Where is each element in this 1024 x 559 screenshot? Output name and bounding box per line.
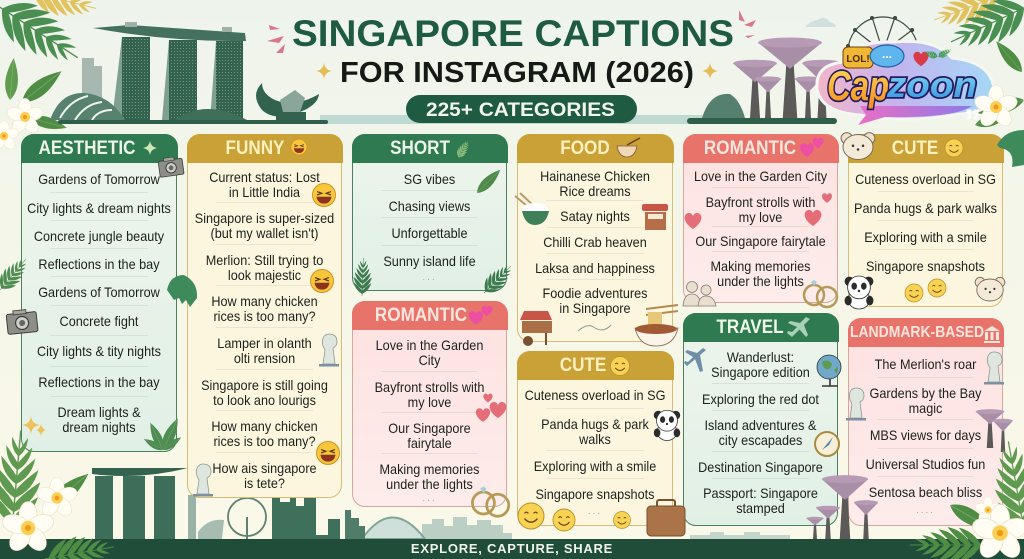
captions: cute (right): Cuteness overload in SG xyxy=(855,171,996,187)
gold star left xyxy=(316,63,332,79)
flowers top left xyxy=(0,98,45,152)
icon: supertrees landmark xyxy=(976,409,1013,452)
heading: cute (middle) xyxy=(516,350,674,380)
centre dome xyxy=(175,109,247,120)
skyline bottom left xyxy=(92,468,365,541)
captions: romantic (right): Bayfront strolls with xyxy=(706,194,815,210)
captions: aesthetic: Concrete jungle beauty xyxy=(34,228,164,244)
icon: sprig short right xyxy=(478,260,517,299)
captions: cute (middle): ... xyxy=(588,506,602,517)
heading: landmark-based xyxy=(848,318,1004,346)
captions: funny: look majestic xyxy=(228,267,301,283)
captions: romantic (middle): Bayfront strolls with xyxy=(375,379,484,395)
dome right xyxy=(702,94,745,118)
base strip left xyxy=(58,120,328,124)
panel: travel xyxy=(683,313,838,526)
icon: smileys right xyxy=(905,279,946,302)
icon: hamster xyxy=(841,133,875,160)
captions: food: Rice dreams xyxy=(559,183,631,199)
captions: landmark-based: The Merlion's roar xyxy=(875,356,976,372)
palm fronds: top left xyxy=(0,0,100,133)
captions: travel: city escapades xyxy=(719,432,802,448)
captions: cute (middle): Cuteness overload in SG xyxy=(525,387,665,403)
icon: merlion sketch funny right xyxy=(319,334,339,366)
captions: romantic (middle): Our Singapore xyxy=(388,420,471,436)
captions: travel: Destination Singapore xyxy=(698,459,823,475)
captions: funny: in Little India xyxy=(229,184,300,200)
Capzoon logo xyxy=(817,41,994,141)
panel: aesthetic xyxy=(21,134,177,452)
captions: funny: Merlion: Still trying to xyxy=(206,252,323,268)
captions: cute (right): Singapore snapshots xyxy=(866,258,985,274)
ferris wheel xyxy=(848,17,918,87)
panel: landmark-based xyxy=(848,318,1003,526)
captions: funny: is tete? xyxy=(244,475,285,491)
captions: food: in Singapore xyxy=(559,300,631,316)
captions: romantic (middle): fairytale xyxy=(407,435,452,451)
panel: romantic (right) xyxy=(683,134,838,303)
captions: cute (middle): Panda hugs & park xyxy=(541,416,649,432)
captions: cute (middle): Singapore snapshots xyxy=(535,486,655,502)
Marina Bay Sands towers xyxy=(82,22,246,120)
captions: aesthetic: dream nights xyxy=(62,419,136,435)
Capzoon logo: ” xyxy=(964,103,981,141)
icon: fern left xyxy=(0,253,33,296)
title sparks right xyxy=(739,10,756,38)
captions: cute (right) xyxy=(854,171,997,274)
captions: short: Sunny island life xyxy=(383,253,476,269)
icon: panda right xyxy=(845,276,873,309)
captions: cute (middle) xyxy=(525,387,665,517)
captions: romantic (right): my love xyxy=(739,209,782,225)
captions: funny: (but my wallet isn't) xyxy=(210,225,319,241)
Capzoon logo: zoon xyxy=(886,64,977,105)
captions: travel: Singapore edition xyxy=(711,364,810,380)
captions: food: Laksa and happiness xyxy=(535,260,655,276)
pale skyline bottom right xyxy=(690,532,790,539)
captions: short xyxy=(381,171,478,283)
captions: aesthetic xyxy=(27,171,171,435)
captions: romantic (middle): Making memories xyxy=(379,461,479,477)
captions: romantic (right) xyxy=(694,168,827,289)
captions: romantic (right): Love in the Garden City xyxy=(694,168,827,184)
heading: short: SHORT xyxy=(390,138,449,158)
captions: landmark-based: magic xyxy=(909,400,942,416)
icon: hearts romantic right xyxy=(800,138,823,157)
captions: romantic (middle): Love in the Garden xyxy=(376,337,483,353)
icon: suitcase xyxy=(647,500,685,536)
captions: funny: How ais singapore xyxy=(212,460,317,476)
captions: landmark-based: .... xyxy=(916,505,935,516)
captions: funny: rices is too many? xyxy=(213,433,316,449)
captions: landmark-based xyxy=(866,356,985,516)
captions: funny: Singapore is still going xyxy=(201,377,328,393)
panel: cute (right) xyxy=(848,134,1003,307)
captions: short: Chasing views xyxy=(389,198,470,214)
captions: aesthetic: City lights & dream nights xyxy=(27,200,171,216)
captions: food xyxy=(535,168,655,316)
Capzoon logo: Cap xyxy=(827,62,889,109)
heading: funny: FUNNY xyxy=(225,138,284,158)
heading: romantic (right): ROMANTIC xyxy=(703,138,796,158)
captions: food: Hainanese Chicken xyxy=(540,168,650,184)
heading: cute (right): CUTE xyxy=(891,138,938,158)
palm bottom left xyxy=(0,428,117,559)
Capzoon logo: LOL! xyxy=(846,54,870,65)
captions: food: Foodie adventures xyxy=(543,285,647,301)
icon: smiley small xyxy=(614,512,630,528)
captions: landmark-based: Gardens by the Bay xyxy=(870,385,981,401)
captions: funny: How many chicken xyxy=(211,293,318,309)
badge: 225+ categories: 225+ CATEGORIES xyxy=(426,99,615,121)
flower and leaf top right xyxy=(973,85,1019,130)
captions: funny: olti rension xyxy=(234,350,295,366)
icon: panda middle xyxy=(654,410,680,440)
captions: cute (right): Panda hugs & park walks xyxy=(854,200,997,216)
captions: funny: Current status: Lost xyxy=(209,169,320,185)
captions: travel xyxy=(698,349,823,516)
captions: funny: Singapore is super-sized xyxy=(195,210,334,226)
captions: funny: rices is too many? xyxy=(213,308,316,324)
small cloud xyxy=(805,18,836,27)
heading: travel xyxy=(682,312,838,342)
captions: aesthetic: City lights & tity nights xyxy=(37,343,161,359)
icon: monstera xyxy=(167,275,197,307)
icon: rings middle xyxy=(472,486,509,516)
heading: aesthetic: AESTHETIC xyxy=(38,138,135,158)
icon: smiley large xyxy=(518,503,544,529)
palm fronds: top right xyxy=(928,0,1024,120)
icon: cute emoji middle xyxy=(610,356,630,376)
icon: hearts middle xyxy=(476,394,506,422)
captions: short: SG vibes xyxy=(404,171,455,187)
captions: aesthetic: Reflections in the bay xyxy=(38,256,160,272)
captions: food: Satay nights xyxy=(560,208,630,224)
icon: sprig short heading xyxy=(454,138,472,160)
captions: aesthetic: Reflections in the bay xyxy=(38,374,160,390)
icon: merlion right xyxy=(984,352,1004,384)
icon: supertrees bottom xyxy=(806,475,878,539)
captions: short: Unforgettable xyxy=(391,225,468,241)
icon: plane travel heading xyxy=(787,317,810,337)
icon: food cart xyxy=(520,311,552,346)
captions: romantic (middle): under the lights xyxy=(386,476,473,492)
captions: cute (middle): Exploring with a smile xyxy=(534,458,656,474)
icon: sparkle aesthetic xyxy=(143,141,157,155)
Supertrees top right xyxy=(687,38,842,124)
heading: romantic (middle): ROMANTIC xyxy=(374,304,467,326)
captions: travel: Exploring the red dot xyxy=(702,391,819,407)
captions: romantic (middle): City xyxy=(419,352,440,368)
panel: short xyxy=(352,134,507,291)
badge: 225+ categories xyxy=(406,95,637,123)
ArtScience Museum xyxy=(256,83,319,120)
icon: noodle bowl food heading xyxy=(617,138,640,157)
icon: leaf short xyxy=(473,166,504,197)
heading: food xyxy=(516,134,674,162)
footer band xyxy=(0,539,1024,559)
panel: food xyxy=(517,134,673,342)
icon: laugh emoji 2 xyxy=(310,270,334,292)
arch bottom centre xyxy=(362,518,425,539)
captions: cute (right): Exploring with a smile xyxy=(864,229,987,245)
gold star right xyxy=(702,63,718,79)
captions: funny: Lamper in olanth xyxy=(217,335,312,351)
icon: monstera top right xyxy=(997,130,1024,167)
icon: hearts romantic middle xyxy=(469,306,492,325)
icon: camera aesthetic left xyxy=(6,308,38,335)
icon: laugh emoji heading xyxy=(291,139,307,155)
dome stripes xyxy=(60,96,112,120)
icon: noodle bowl xyxy=(635,305,678,346)
Capzoon logo: ... xyxy=(882,47,892,61)
captions: travel: stamped xyxy=(736,500,785,516)
heading: aesthetic xyxy=(20,134,178,162)
icon: museum landmark heading xyxy=(984,326,1000,343)
panel: funny xyxy=(187,134,342,498)
captions: aesthetic: Gardens of Tomorrow xyxy=(38,284,160,300)
heading: cute (right) xyxy=(848,134,1004,162)
icon: merlion sketch funny left xyxy=(193,464,213,496)
captions: cute (middle): walks xyxy=(579,431,611,447)
heading: food: FOOD xyxy=(560,138,609,158)
captions: travel: Island adventures & xyxy=(705,417,816,433)
captions: aesthetic: Concrete fight xyxy=(60,313,138,329)
captions: romantic (right): Our Singapore fairytale xyxy=(695,233,826,249)
title line 2: FOR INSTAGRAM (2026) xyxy=(340,57,694,89)
icon: laugh emoji 1 xyxy=(312,184,336,206)
heading: short xyxy=(352,134,508,162)
captions: travel: Wanderlust: xyxy=(727,349,794,365)
title sparks left xyxy=(267,25,285,53)
captions: aesthetic: Gardens of Tomorrow xyxy=(38,171,160,187)
heading: romantic (right) xyxy=(682,134,838,162)
captions: funny xyxy=(195,169,334,491)
icon: sprig short left xyxy=(353,258,372,296)
icon: gold sparkles xyxy=(22,416,46,436)
icon: globe xyxy=(817,355,841,386)
heading: romantic (middle) xyxy=(352,300,508,330)
captions: romantic (middle): my love xyxy=(408,394,451,410)
captions: landmark-based: Universal Studios fun xyxy=(866,456,985,472)
heading: travel: TRAVEL xyxy=(716,316,783,338)
pale skyline bottom centre xyxy=(422,517,512,539)
icon: rice bowl xyxy=(515,193,549,225)
icon: steam squiggle xyxy=(578,325,611,331)
icon: food stall xyxy=(642,204,668,230)
icon: merlion left xyxy=(846,388,866,420)
dome left xyxy=(50,93,125,120)
heading: landmark-based: LANDMARK-BASED xyxy=(849,324,984,340)
icon: cute emoji right xyxy=(945,139,963,157)
captions: food: Chilli Crab heaven xyxy=(543,234,647,250)
icon: plant aesthetic xyxy=(142,416,183,453)
captions: short: ... xyxy=(422,272,437,283)
captions: romantic (right): Making memories xyxy=(710,258,810,274)
icon: compass xyxy=(815,432,839,456)
heading: funny xyxy=(186,134,342,162)
captions: landmark-based: MBS views for days xyxy=(870,427,981,443)
footer band: EXPLORE, CAPTURE, SHARE xyxy=(411,541,613,556)
icon: bear xyxy=(975,277,1005,301)
icon: plane travel xyxy=(684,348,706,372)
panel: romantic (middle) xyxy=(352,301,507,507)
captions: romantic (middle): ... xyxy=(422,493,437,504)
panel: cute (middle) xyxy=(517,351,673,526)
heading: cute (middle): CUTE xyxy=(559,354,606,376)
bay water xyxy=(320,115,710,124)
captions: travel: Passport: Singapore xyxy=(703,485,818,501)
icon: camera aesthetic top xyxy=(158,156,184,177)
title line 1: SINGAPORE CAPTIONS xyxy=(292,13,734,54)
captions: funny: to look ano lourigs xyxy=(213,392,316,408)
icon: laugh emoji 3 xyxy=(316,442,340,464)
icon: hearts right xyxy=(685,193,832,229)
captions: romantic (right): under the lights xyxy=(717,273,804,289)
captions: aesthetic: Dream lights & xyxy=(57,404,141,420)
captions: landmark-based: Sentosa beach bliss xyxy=(869,484,982,500)
icon: couple xyxy=(683,282,716,306)
icon: rings right xyxy=(804,280,837,307)
palm and flower bottom right xyxy=(910,438,1024,559)
captions: funny: How many chicken xyxy=(211,418,318,434)
icon: smiley medium xyxy=(553,509,575,531)
captions: romantic (middle) xyxy=(375,337,484,504)
